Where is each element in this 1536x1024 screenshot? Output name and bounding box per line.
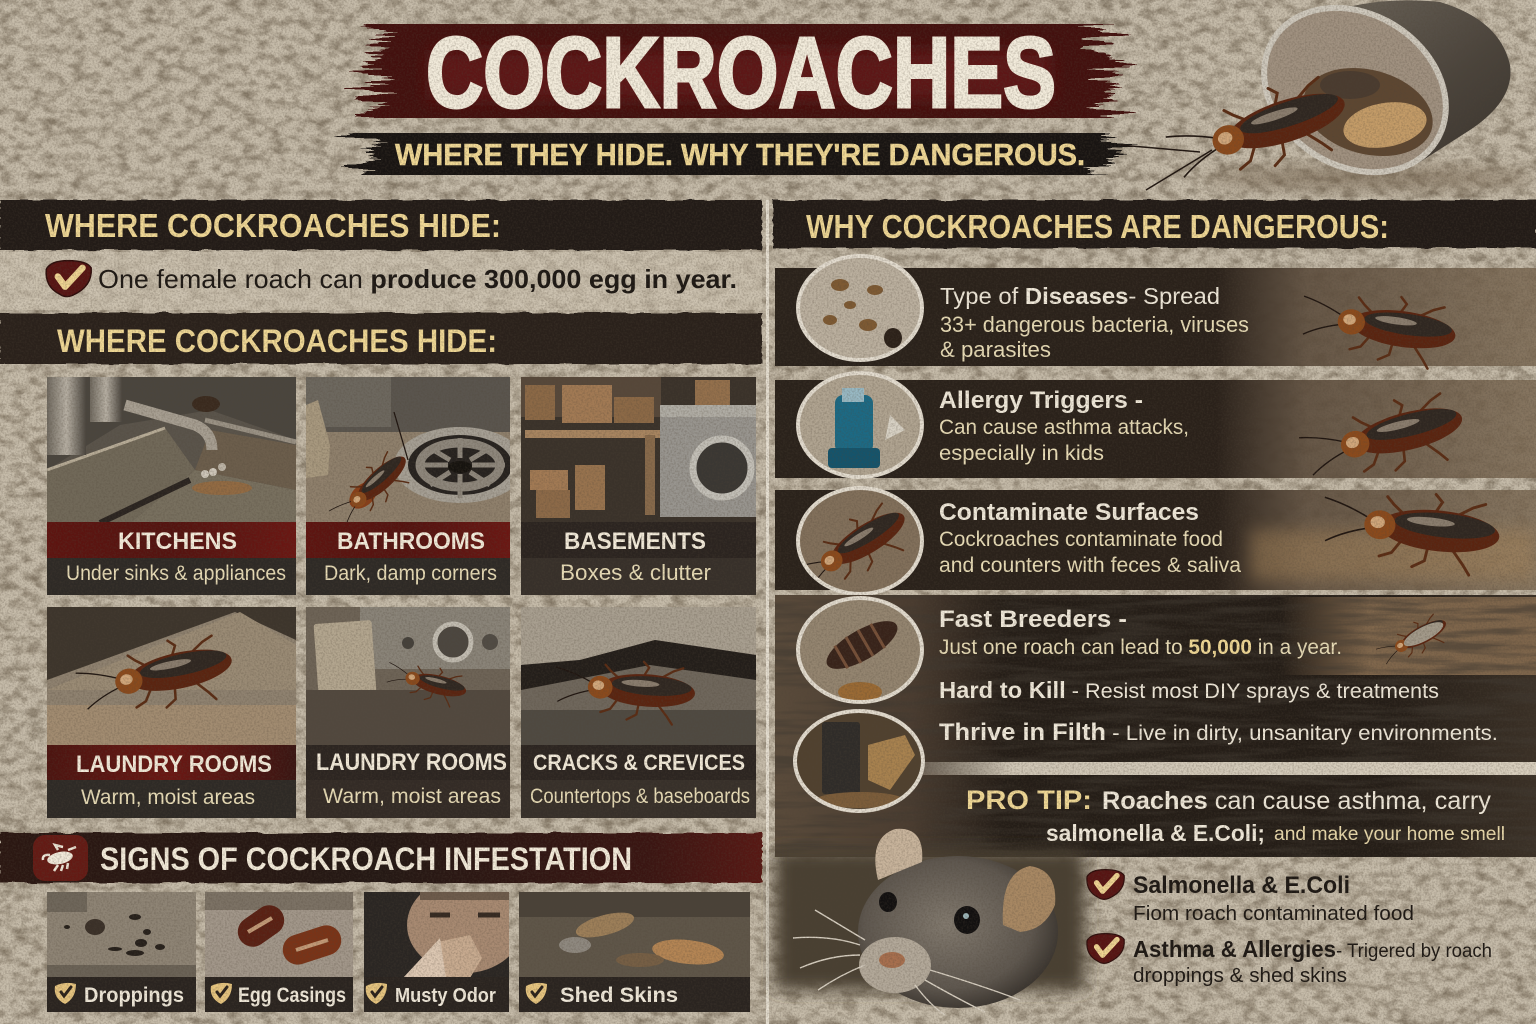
row: allergy triggers [775, 371, 1536, 479]
card: droppings: Droppings [84, 984, 184, 1007]
header bar: where cockroaches hide second: WHERE COCKROACHES HIDE: [57, 323, 497, 359]
row: allergy triggers: especially in kids [939, 442, 1104, 465]
row: fast breeders [795, 595, 1454, 705]
card: musty odor [364, 892, 509, 1012]
card: cracks and crevices [521, 607, 756, 818]
card: cracks and crevices: Countertops & baseboards [530, 785, 750, 808]
image: inhaler [795, 370, 925, 480]
row: allergy triggers: Can cause asthma attacks, [939, 416, 1189, 439]
callout: pro tip: salmonella & E.Coli; [1046, 820, 1265, 846]
panel: where cockroaches hide [0, 200, 762, 1012]
item: salmonella: Fiom roach contaminated food [1133, 903, 1414, 925]
row: contaminate surfaces: Contaminate Surfaces [939, 499, 1199, 526]
callout: pro tip: and make your home smell [1274, 824, 1505, 845]
card: shed skins: Shed Skins [560, 984, 678, 1007]
row: fast breeders: Just one roach can lead to 50,000 in a year. [939, 636, 1342, 659]
callout: pro tip: Roaches can cause asthma, carry [1102, 787, 1491, 815]
stat callout: 300,000 eggs: One female roach can produce 300,000 egg in year. [98, 264, 737, 294]
card: laundry rooms left: Warm, moist areas [81, 786, 255, 809]
header bar: where cockroaches hide: WHERE COCKROACHES HIDE: [45, 207, 501, 244]
row: hard to kill: Hard to Kill - Resist most DIY sprays & treatments [939, 677, 1439, 703]
header bar: where cockroaches hide [0, 200, 762, 250]
card: laundry rooms left: LAUNDRY ROOMS [76, 751, 272, 778]
row: fast breeders: Fast Breeders - [939, 606, 1127, 633]
icon: small nymph [1373, 609, 1454, 672]
item: asthma and allergies [1087, 934, 1492, 987]
title brush band [372, 24, 1108, 118]
row: contaminate surfaces [775, 486, 1536, 595]
callout: pro tip: PRO TIP: [966, 785, 1092, 815]
image: nymph [795, 595, 925, 705]
icon: cockroach [1318, 483, 1503, 578]
card: egg casings [205, 892, 353, 1012]
header bar: where cockroaches hide second [0, 313, 762, 364]
card: kitchens: KITCHENS [118, 528, 237, 555]
illustration: rat [775, 829, 1085, 1015]
icon: cockroach [1296, 284, 1460, 372]
card: laundry rooms centre [306, 607, 510, 818]
image: trash [793, 708, 927, 814]
image: roach on surface [796, 486, 924, 595]
row: thrive in filth: Thrive in Filth - Live in dirty, unsanitary environments. [939, 719, 1498, 746]
card: laundry rooms centre: LAUNDRY ROOMS [316, 749, 507, 776]
row: contaminate surfaces: Cockroaches contaminate food [939, 528, 1223, 551]
subtitle: WHERE THEY HIDE. WHY THEY'RE DANGEROUS. [395, 137, 1085, 172]
header bar: why cockroaches are dangerous [773, 200, 1536, 248]
subtitle brush band [360, 133, 1110, 175]
item: salmonella: Salmonella & E.Coli [1133, 872, 1350, 899]
card: kitchens: Under sinks & appliances [66, 562, 286, 585]
card: bathrooms [306, 377, 526, 595]
card: bathrooms: Dark, damp corners [324, 562, 497, 585]
item: asthma and allergies: - Trigered by roach [1336, 941, 1492, 962]
header bar: signs of infestation [0, 833, 762, 883]
card: basements: BASEMENTS [564, 528, 706, 555]
row: diseases: & parasites [940, 337, 1051, 362]
card: kitchens [47, 377, 296, 595]
stat callout: 300,000 eggs [0, 252, 762, 310]
card: basements: Boxes & clutter [560, 560, 711, 585]
card: shed skins [519, 892, 750, 1012]
row: diseases: Type of Diseases- Spread [940, 283, 1220, 309]
row: diseases [775, 250, 1536, 372]
card: laundry rooms left [47, 607, 296, 818]
row: diseases: 33+ dangerous bacteria, viruses [940, 312, 1249, 337]
item: asthma and allergies: Asthma & Allergies [1133, 936, 1336, 962]
callout: pro tip [966, 785, 1505, 846]
header bar: why cockroaches are dangerous: WHY COCKROACHES ARE DANGEROUS: [806, 208, 1389, 245]
panel: why cockroaches are dangerous [773, 200, 1536, 1015]
row: thrive in filth [793, 708, 1498, 814]
card: droppings [47, 892, 196, 1012]
card: musty odor: Musty Odor [395, 985, 496, 1007]
card: egg casings: Egg Casings [238, 984, 346, 1007]
card: basements [521, 377, 756, 595]
item: salmonella [1087, 870, 1414, 925]
icon: roach badge [33, 835, 88, 881]
illustration: tipped jar with cockroach [1120, 0, 1535, 205]
header bar: signs of infestation: SIGNS OF COCKROACH INFESTATION [100, 841, 632, 877]
row: contaminate surfaces: and counters with feces & saliva [939, 554, 1241, 577]
item: asthma and allergies: droppings & shed skins [1133, 965, 1347, 987]
section divider [766, 200, 769, 1024]
card: cracks and crevices: CRACKS & CREVICES [533, 750, 745, 775]
icon: cockroach [1296, 386, 1471, 493]
background: wood band behind lower rows [775, 595, 1536, 857]
image: diseases [795, 250, 925, 365]
row: allergy triggers: Allergy Triggers - [939, 387, 1143, 414]
title: COCKROACHES [426, 17, 1056, 129]
card: laundry rooms centre: Warm, moist areas [323, 785, 501, 808]
card: bathrooms: BATHROOMS [337, 528, 485, 555]
